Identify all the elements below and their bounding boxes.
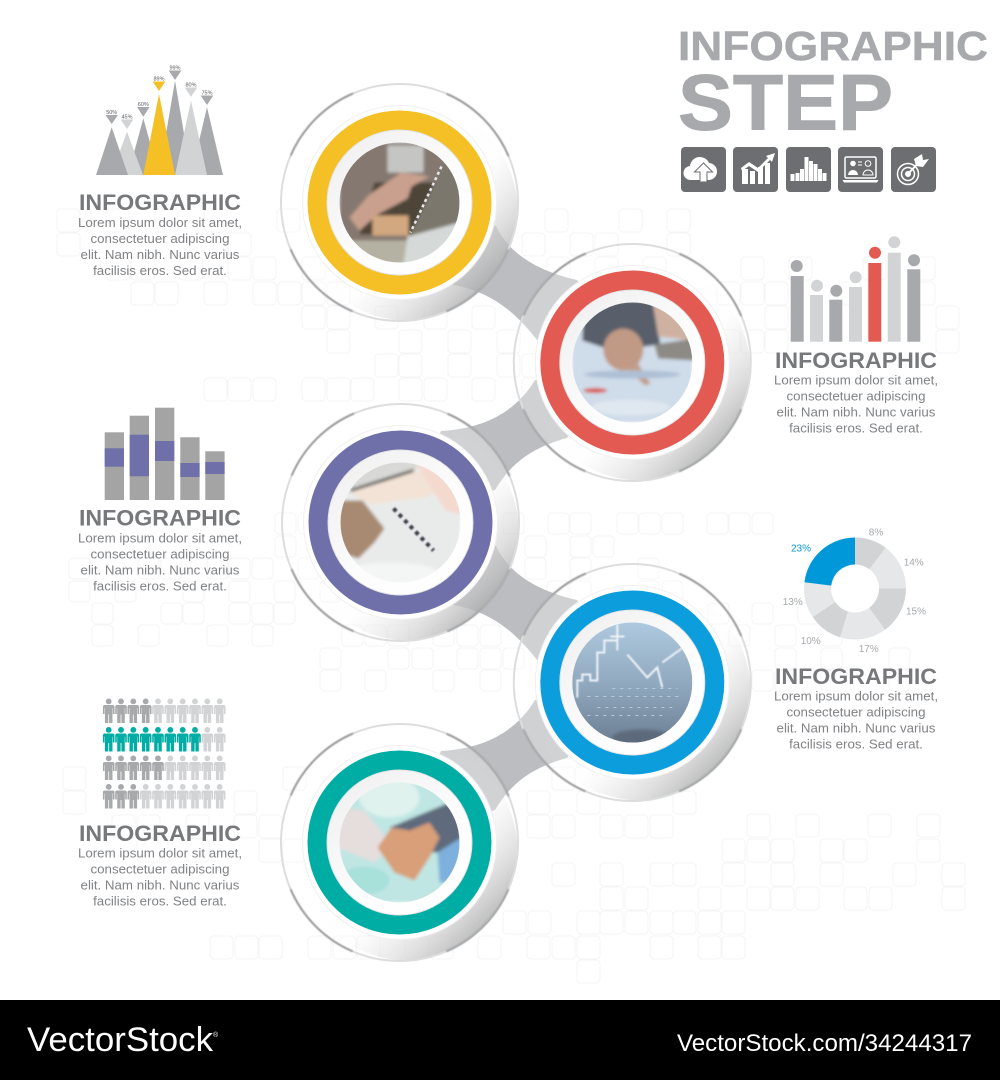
text block: left top: consectetuer adipiscing [91,231,229,246]
text block: right top [774,348,938,436]
photo: stock chart [572,622,692,746]
footer watermark bar: VectorStock.com/34244317 [677,1030,972,1057]
text block: left middle: Lorem ipsum dolor sit amet, [78,530,242,546]
connector: step 3 to 4 [399,522,632,682]
footer watermark bar: VectorStock [27,1021,214,1059]
icon row [681,147,936,192]
text block: right bottom [774,664,938,752]
chart: stacked bars purple [105,408,225,500]
step 3: purple circle [282,404,519,641]
text block: left bottom: Lorem ipsum dolor sit amet, [78,846,242,860]
text block: left top: Lorem ipsum dolor sit amet, [78,215,242,230]
footer watermark bar: ® [213,1031,219,1039]
text block: left bottom: consectetuer adipiscing [91,862,229,876]
chart: donut: 13% [783,597,803,608]
connector: step 4 to 5 [400,682,632,842]
text block: right top: INFOGRAPHIC [775,348,937,373]
text block: left middle: elit. Nam nibh. Nunc varius [81,562,240,578]
text block: right top: elit. Nam nibh. Nunc varius [777,404,936,420]
photo: hand with pen and paper [338,460,462,586]
chart: donut: 8% [869,528,883,538]
chart: donut: 23% [791,544,811,554]
text block: right bottom: facilisis eros. Sed erat. [789,736,923,752]
text block: left middle: consectetuer adipiscing [91,546,229,562]
chart: donut [783,528,926,655]
text block: right bottom: consectetuer adipiscing [787,704,925,720]
text block: right top: Lorem ipsum dolor sit amet, [774,372,938,388]
text block: right top: facilisis eros. Sed erat. [789,420,923,436]
chart: triangle peaks: 45% [121,114,133,120]
text block: right bottom: elit. Nam nibh. Nunc varius [777,720,936,736]
icon: cloud upload [681,147,726,192]
text block: right bottom: INFOGRAPHIC [775,664,937,689]
chart: triangle peaks: 75% [201,90,213,96]
chart: triangle peaks: 80% [185,82,197,88]
chart: donut: 14% [904,558,924,568]
step 1: yellow circle [281,84,518,321]
photo: hand on laptop [340,142,462,264]
title: INFOGRAPHIC STEP: STEP [678,58,893,146]
text block: left bottom [78,821,242,908]
text block: left top: facilisis eros. Sed erat. [93,263,227,278]
chart: people pictogram [103,698,226,808]
text block: left top: INFOGRAPHIC [79,190,241,215]
connector: step 1 to 2 [399,202,632,362]
text block: right bottom: Lorem ipsum dolor sit amet, [774,688,938,704]
chart: lollipop bars [791,236,920,342]
text block: left middle [78,506,242,594]
text block: left bottom: facilisis eros. Sed erat. [93,894,227,908]
title: INFOGRAPHIC STEP: INFOGRAPHIC [678,23,988,69]
step 4: blue circle [514,564,751,801]
icon: target and arrow [891,147,936,192]
step 2: red circle [514,244,751,481]
text block: left top: elit. Nam nibh. Nunc varius [81,247,240,262]
connectors between step circles [399,202,632,842]
chart: triangle peaks: 89% [153,76,165,82]
chart: triangle peaks: 60% [138,102,149,108]
text block: left bottom: INFOGRAPHIC [79,821,241,846]
chart: donut: 17% [859,644,879,655]
icon: growth bars [733,147,778,192]
step 5: teal circle [281,724,518,961]
chart: triangle peaks: 50% [106,110,117,116]
title: INFOGRAPHIC STEP [678,23,988,146]
icon: histogram [786,147,831,192]
icon: laptop video call [838,147,883,192]
text block: left middle: facilisis eros. Sed erat. [93,578,227,594]
connector: step 2 to 3 [400,362,632,522]
photo: handshake [338,778,462,902]
chart: donut: 10% [801,636,821,647]
chart: triangle peaks: 99% [169,66,181,72]
chart: triangle peaks [96,66,223,175]
photo: hand writing on paper [572,300,694,422]
chart: donut: 15% [906,606,926,618]
text block: left bottom: elit. Nam nibh. Nunc varius [81,878,240,892]
text block: right top: consectetuer adipiscing [787,388,925,404]
footer watermark bar [0,1000,1000,1080]
text block: left middle: INFOGRAPHIC [79,506,241,530]
text block: left top [78,190,242,278]
